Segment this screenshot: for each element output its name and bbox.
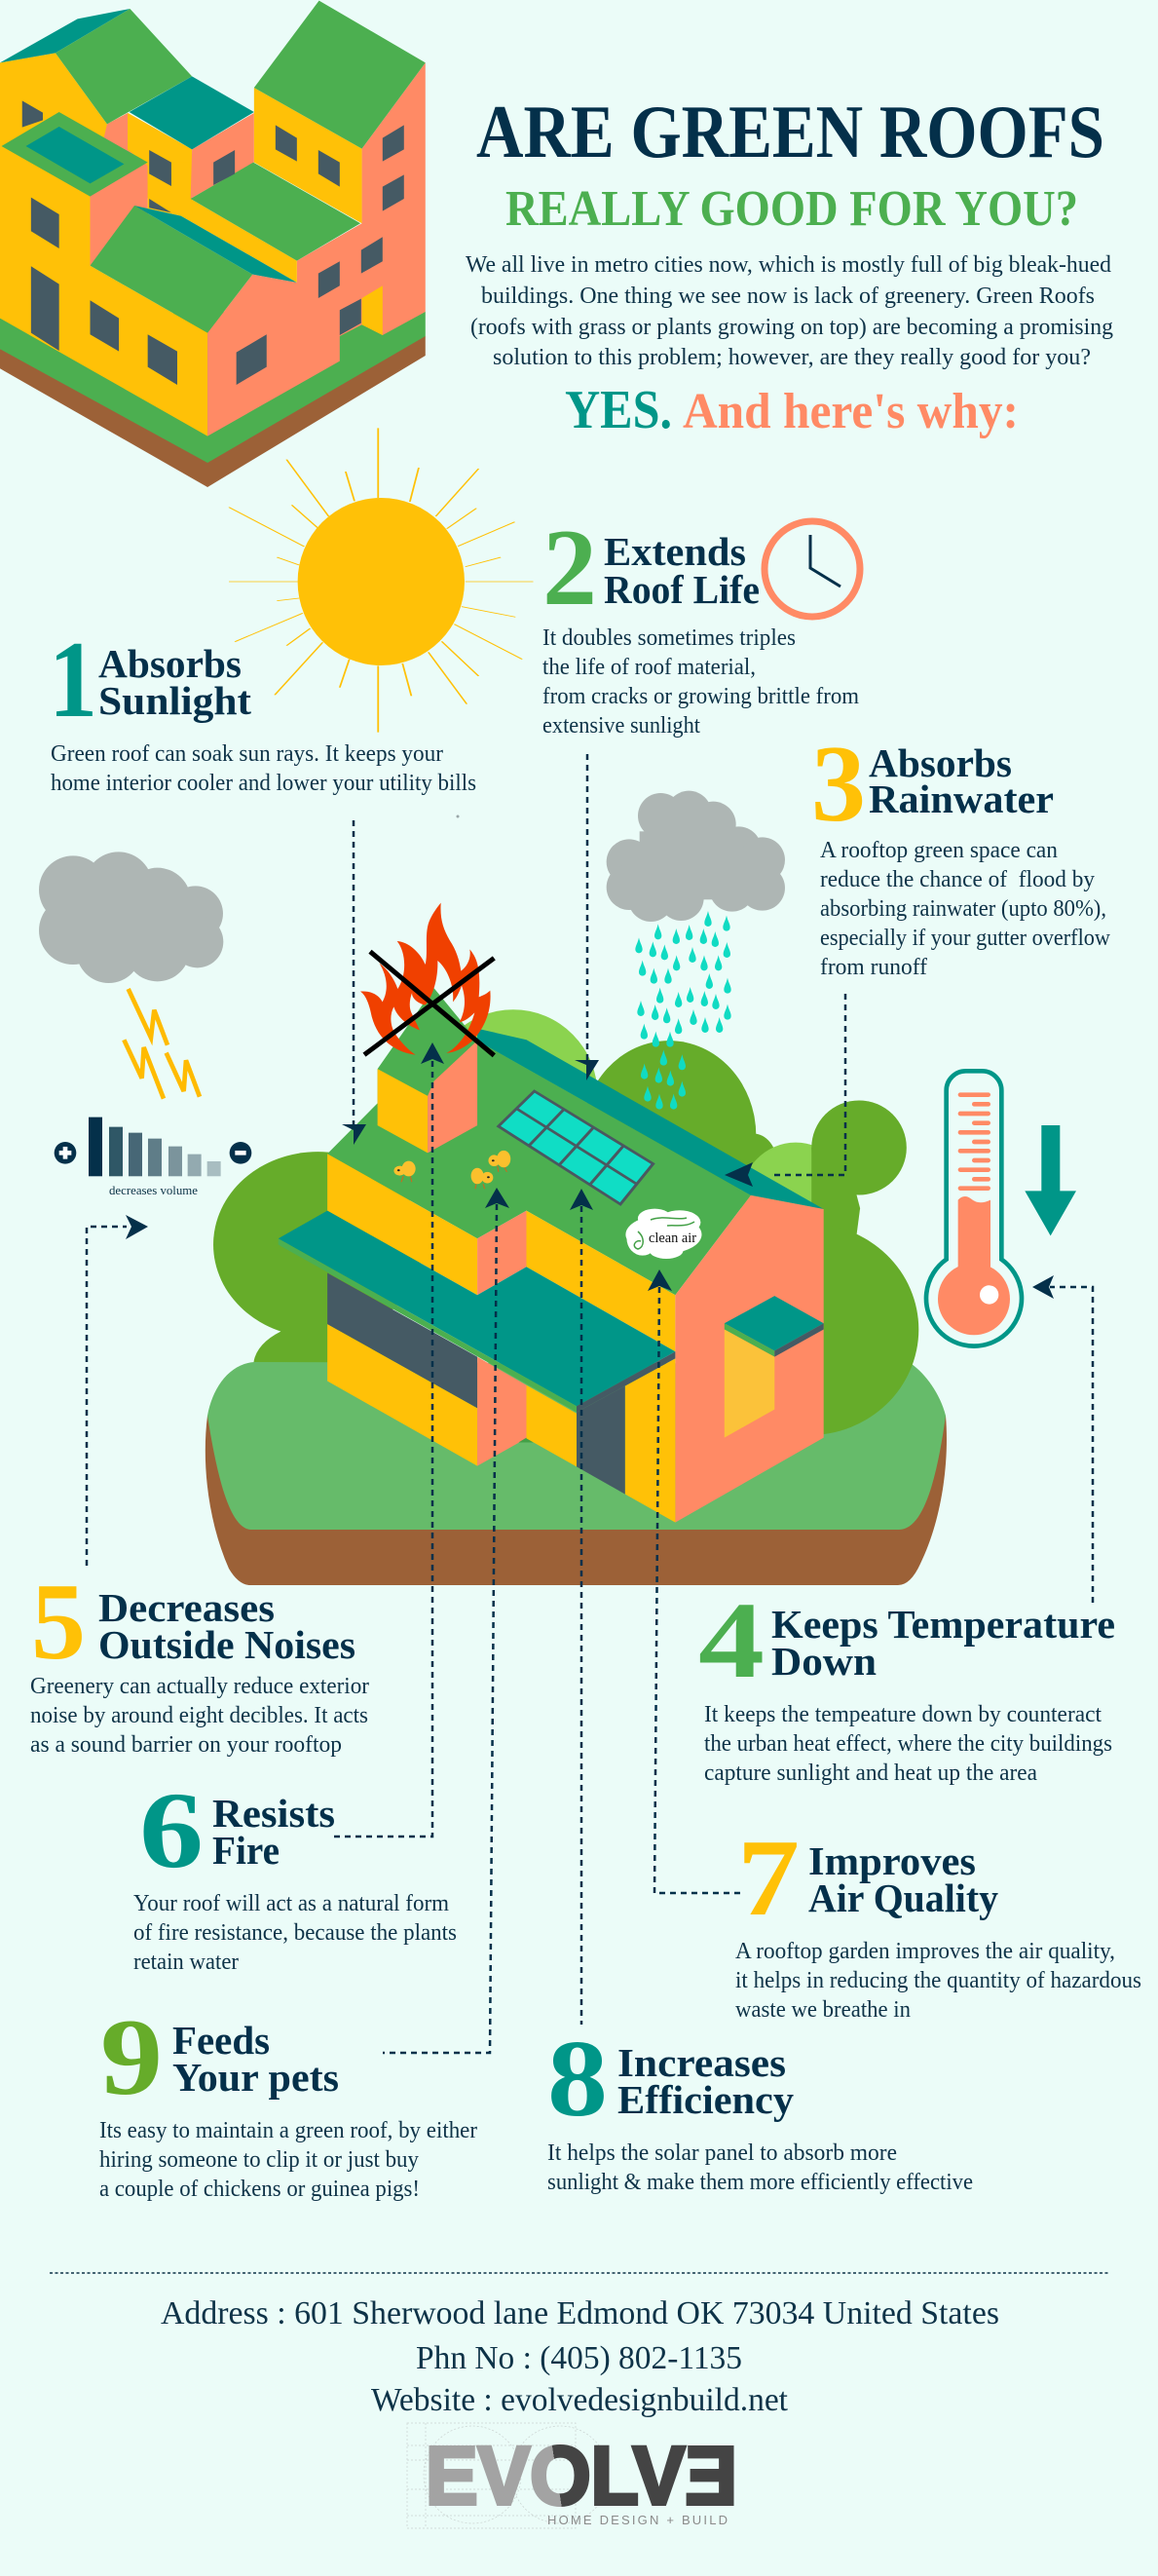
logo: Evolve: HOME DESIGN + BUILD bbox=[547, 2513, 728, 2527]
point 7: improves air quality bbox=[735, 1818, 1141, 2023]
point 7: improves air quality: it helps in reducing the quantity of hazardous bbox=[735, 1968, 1141, 1993]
point 4: keeps temperature down: the urban heat effect, where the city buildings bbox=[704, 1731, 1112, 1757]
point 6: resists fire: Your roof will act as a natural form bbox=[133, 1891, 449, 1916]
icon: chicks bbox=[393, 1151, 510, 1189]
point 4: keeps temperature down: Keeps Temperature bbox=[771, 1602, 1115, 1647]
point 7: improves air quality: waste we breathe in bbox=[735, 1997, 911, 2023]
contact details: Phn No : (405) 802-1135 bbox=[416, 2340, 742, 2376]
point 2: extends roof life bbox=[542, 508, 859, 739]
point 5: decreases outside noises: noise by around eight decibles. It acts bbox=[30, 1703, 368, 1728]
house and hills bbox=[279, 988, 918, 1523]
point 3: absorbs rainwater: Rainwater bbox=[869, 777, 1054, 821]
point 9: feeds your pets: Its easy to maintain a green roof, by either bbox=[99, 2118, 477, 2143]
point 7: improves air quality: 7 bbox=[737, 1818, 800, 1939]
intro paragraph: buildings. One thing we see now is lack of greenery. Green Roofs bbox=[481, 284, 1095, 309]
point 1: absorbs sunlight bbox=[49, 620, 476, 796]
intro paragraph: (roofs with grass or plants growing on top) are becoming a promising bbox=[470, 315, 1113, 340]
point 9: feeds your pets: hiring someone to clip it or just buy bbox=[99, 2147, 419, 2173]
point 2: extends roof life: Extends bbox=[604, 529, 746, 574]
point 5: decreases outside noises: as a sound barrier on your rooftop bbox=[30, 1732, 342, 1758]
point 9: feeds your pets: 9 bbox=[100, 1997, 163, 2118]
point 5: decreases outside noises: Outside Noises bbox=[98, 1622, 355, 1667]
ground island bbox=[205, 1362, 947, 1585]
subtitle: REALLY GOOD FOR YOU? bbox=[505, 181, 1078, 237]
point 3: absorbs rainwater: A rooftop green space can bbox=[820, 838, 1058, 863]
solar panel bbox=[499, 1091, 654, 1204]
arrowheads bbox=[126, 1042, 1054, 1299]
point 2: extends roof life: Roof Life bbox=[604, 567, 760, 612]
point 6: resists fire: retain water bbox=[133, 1950, 239, 1975]
icon: fire crossed out bbox=[360, 903, 494, 1055]
point 3: absorbs rainwater: 3 bbox=[811, 724, 866, 845]
point 7: improves air quality: Improves bbox=[808, 1838, 976, 1883]
icon: clean air cloud: clean air bbox=[649, 1231, 696, 1246]
point 8: increases efficiency: sunlight & make them more efficiently effective bbox=[547, 2170, 973, 2195]
point 1: absorbs sunlight: Sunlight bbox=[98, 678, 251, 723]
point 1: absorbs sunlight: 1 bbox=[49, 620, 97, 740]
point 6: resists fire: 6 bbox=[139, 1770, 204, 1891]
intro paragraph: solution to this problem; however, are they really good for you? bbox=[493, 345, 1091, 370]
point 9: feeds your pets: Your pets bbox=[172, 2055, 339, 2100]
icon: storm cloud with lightning bbox=[39, 852, 223, 1099]
point 6: resists fire bbox=[133, 1770, 457, 1975]
point 4: keeps temperature down bbox=[698, 1580, 1115, 1786]
point 5: decreases outside noises: Decreases bbox=[98, 1585, 275, 1630]
point 2: extends roof life: 2 bbox=[542, 508, 597, 628]
logo: Evolve: EVOLVƎ bbox=[426, 2430, 737, 2521]
point 4: keeps temperature down: It keeps the tempeature down by counteract bbox=[704, 1702, 1102, 1727]
point 7: improves air quality: A rooftop garden improves the air quality, bbox=[735, 1939, 1115, 1964]
point 3: absorbs rainwater: reduce the chance of flood by bbox=[820, 867, 1095, 892]
point 8: increases efficiency: 8 bbox=[547, 2019, 608, 2140]
point 3: absorbs rainwater bbox=[811, 724, 1111, 980]
icon: thermometer bbox=[926, 1071, 1022, 1346]
point 2: extends roof life: the life of roof material, bbox=[542, 655, 756, 680]
intro paragraph bbox=[466, 252, 1113, 370]
answer line: YES. bbox=[565, 380, 672, 440]
illustration: house with green roof bbox=[205, 903, 947, 1585]
illustration: city buildings with green roofs bbox=[0, 1, 426, 487]
point 9: feeds your pets bbox=[99, 1997, 477, 2202]
connector arrows bbox=[87, 754, 1093, 2053]
icon: clock bbox=[765, 521, 860, 617]
point 1: absorbs sunlight: Absorbs bbox=[98, 641, 242, 686]
point 2: extends roof life: It doubles sometimes triples bbox=[542, 625, 796, 651]
icon: down arrow bbox=[1025, 1125, 1076, 1235]
icon: sun bbox=[229, 428, 533, 733]
point 3: absorbs rainwater: especially if your gutter overflow bbox=[820, 926, 1111, 951]
point 4: keeps temperature down: 4 bbox=[698, 1580, 765, 1701]
point 9: feeds your pets: Feeds bbox=[172, 2018, 270, 2063]
point 2: extends roof life: extensive sunlight bbox=[542, 713, 700, 739]
point 3: absorbs rainwater: Absorbs bbox=[869, 740, 1012, 785]
point 3: absorbs rainwater: from runoff bbox=[820, 955, 927, 980]
contact details: Website : evolvedesignbuild.net bbox=[371, 2382, 789, 2418]
point 5: decreases outside noises bbox=[30, 1562, 369, 1758]
volume caption: decreases volume bbox=[109, 1184, 198, 1197]
point 2: extends roof life: from cracks or growing brittle from bbox=[542, 684, 859, 709]
contact details: Address : 601 Sherwood lane Edmond OK 73034 United States bbox=[161, 2295, 999, 2331]
point 1: absorbs sunlight: home interior cooler and lower your utility bills bbox=[51, 771, 476, 796]
icon: rain cloud bbox=[607, 791, 785, 1110]
point 1: absorbs sunlight: Green roof can soak sun rays. It keeps your bbox=[51, 741, 443, 767]
point 7: improves air quality: Air Quality bbox=[808, 1875, 998, 1920]
intro paragraph: We all live in metro cities now, which is mostly full of big bleak-hued bbox=[466, 252, 1111, 278]
point 8: increases efficiency: Efficiency bbox=[617, 2077, 795, 2122]
point 8: increases efficiency: Increases bbox=[617, 2040, 786, 2085]
point 5: decreases outside noises: Greenery can actually reduce exterior bbox=[30, 1674, 369, 1699]
point 6: resists fire: Fire bbox=[212, 1828, 280, 1873]
hills behind left bbox=[213, 1152, 423, 1410]
point 3: absorbs rainwater: absorbing rainwater (upto 80%), bbox=[820, 896, 1106, 922]
answer line: And here's why: bbox=[683, 384, 1019, 439]
rain drops bbox=[635, 911, 731, 1110]
point 6: resists fire: Resists bbox=[212, 1791, 335, 1836]
point 4: keeps temperature down: capture sunlight and heat up the area bbox=[704, 1761, 1037, 1786]
icon: clean air cloud bbox=[625, 1209, 701, 1259]
point 6: resists fire: of fire resistance, because the plants bbox=[133, 1920, 457, 1946]
icon: volume bars bbox=[55, 1118, 251, 1176]
point 5: decreases outside noises: 5 bbox=[31, 1562, 86, 1683]
answer line bbox=[565, 380, 1019, 440]
point 8: increases efficiency bbox=[547, 2019, 973, 2195]
point 4: keeps temperature down: Down bbox=[771, 1639, 877, 1684]
point 9: feeds your pets: a couple of chickens or guinea pigs! bbox=[99, 2177, 420, 2202]
contact details bbox=[161, 2295, 999, 2418]
point 8: increases efficiency: It helps the solar panel to absorb more bbox=[547, 2140, 897, 2166]
